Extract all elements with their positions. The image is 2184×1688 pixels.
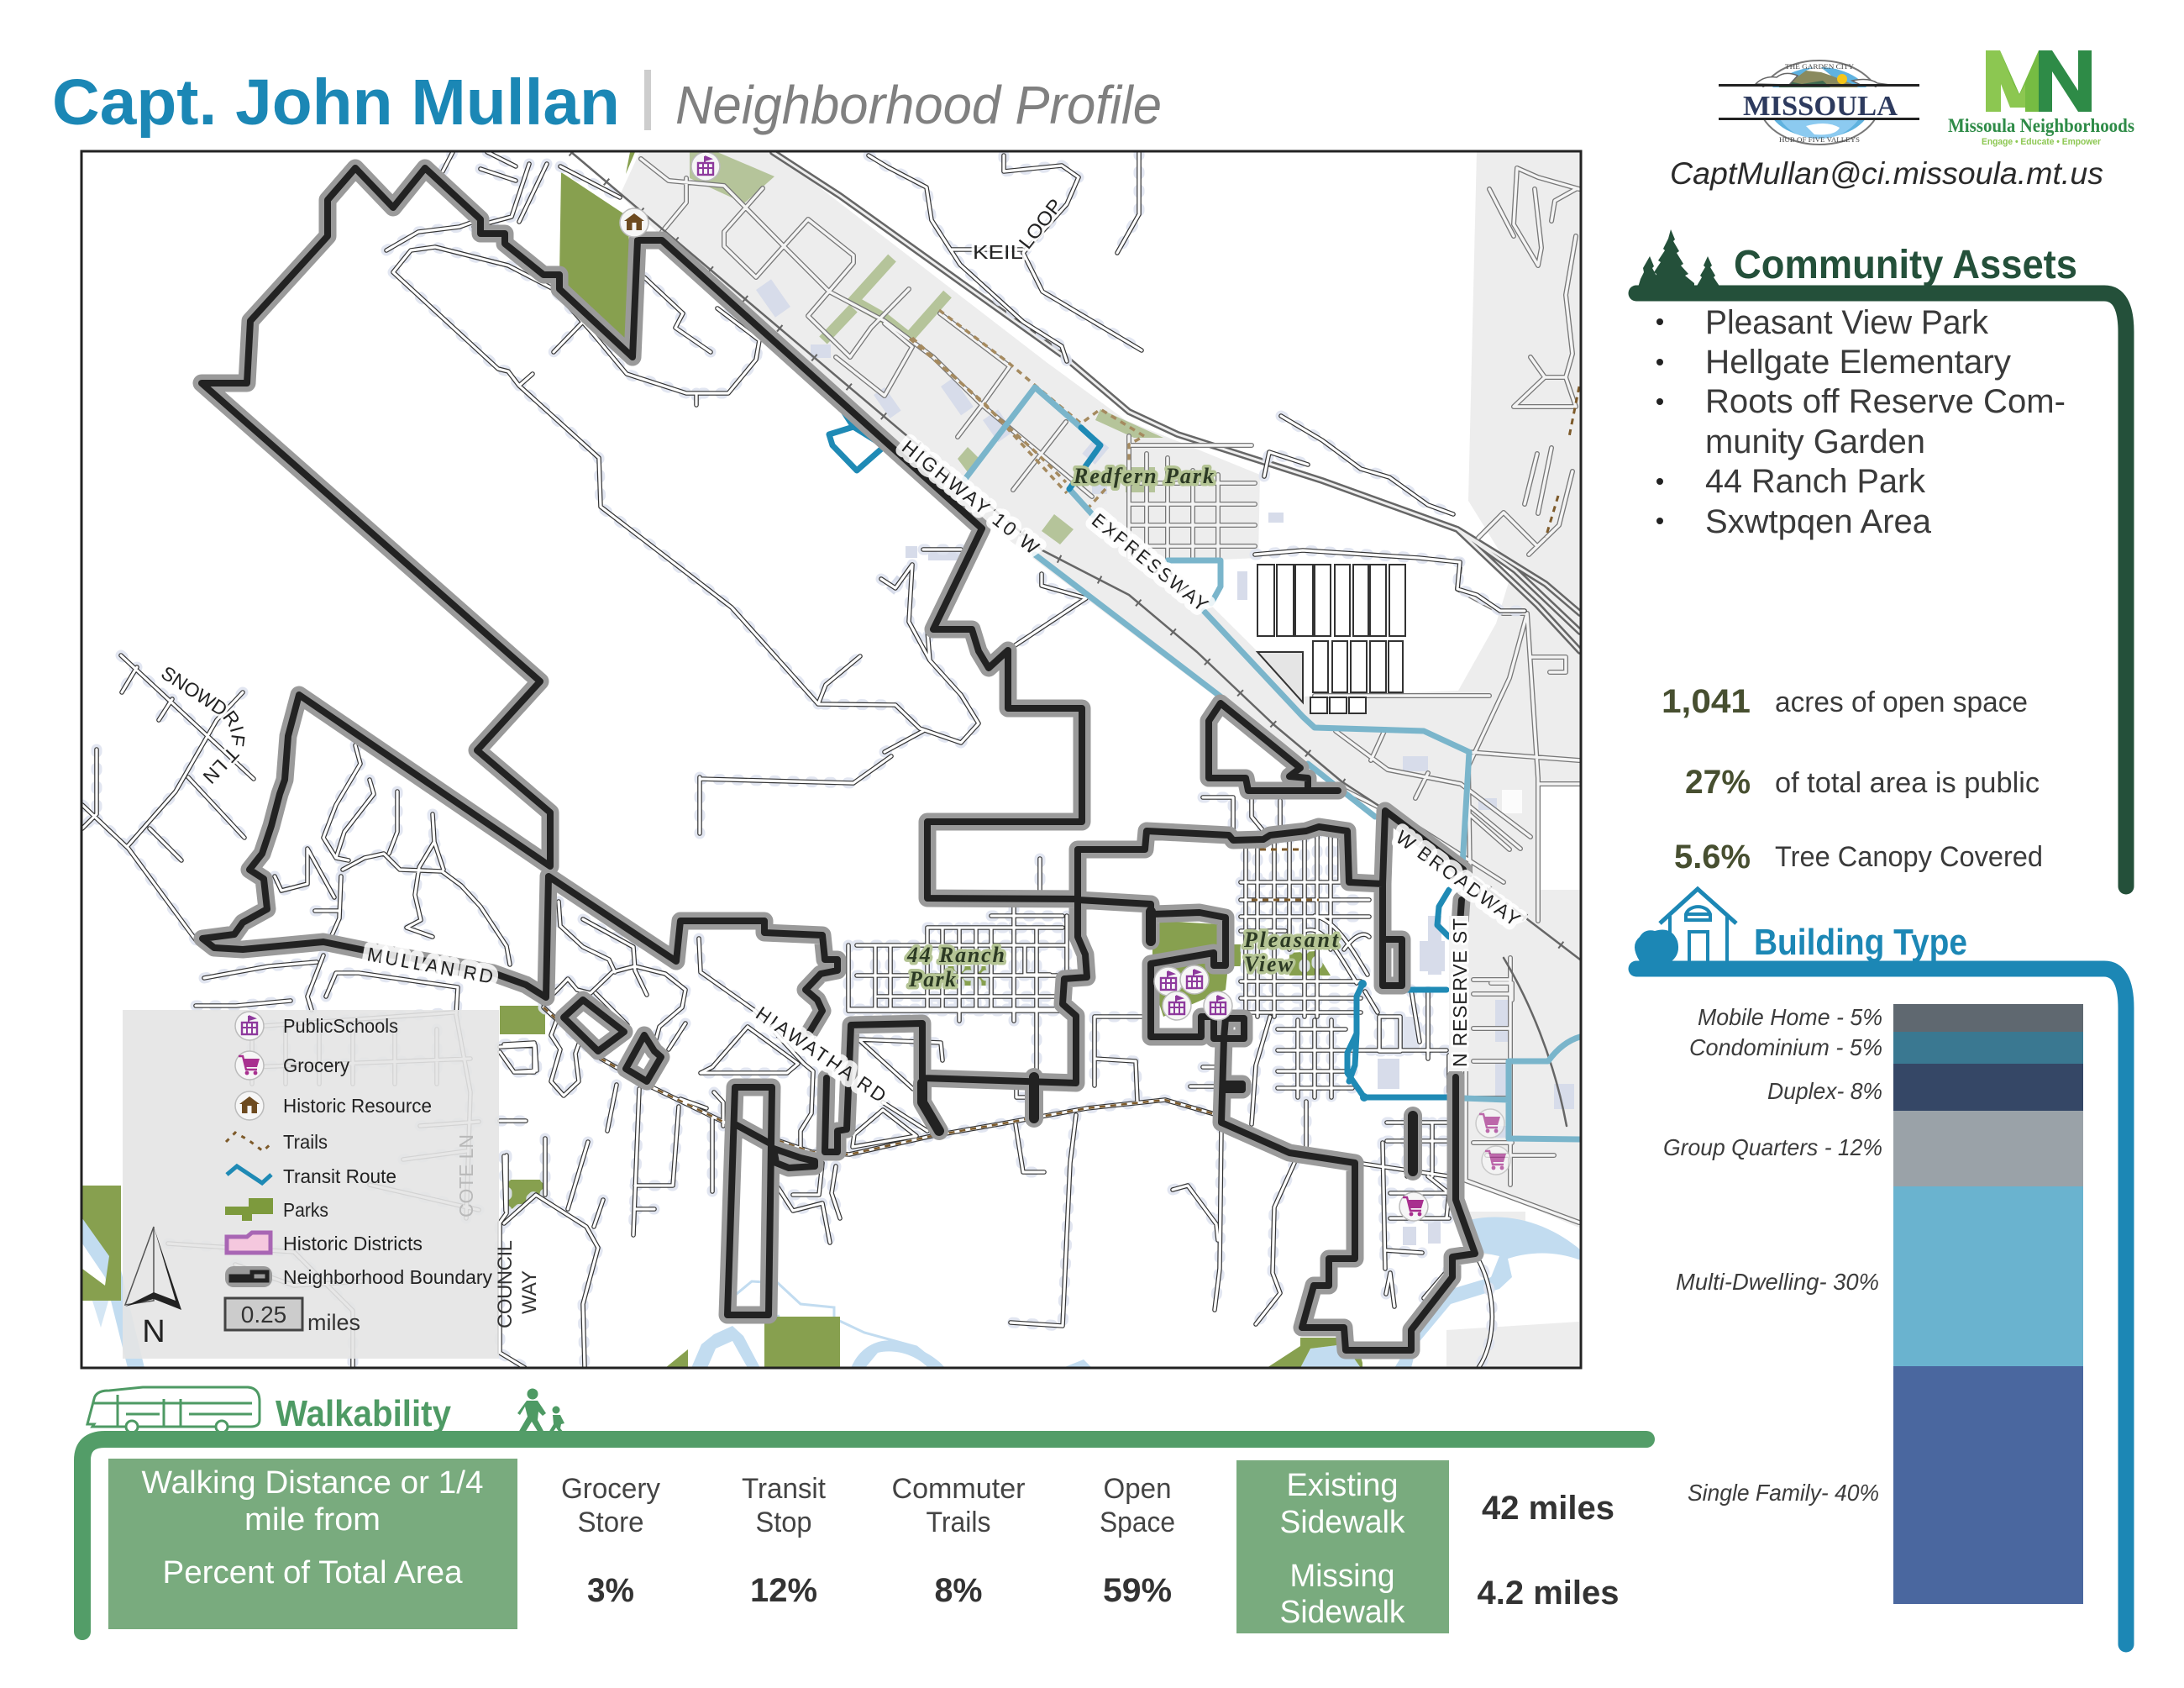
column: commuter trails: 8%	[934, 1572, 983, 1609]
roads on gray	[641, 159, 1579, 1223]
north arrow: N	[142, 1314, 165, 1349]
scale bar: miles	[307, 1310, 360, 1335]
map icons: grocery	[1399, 1109, 1510, 1221]
stat: public area: 27%	[1685, 764, 1751, 801]
scale bar	[225, 1298, 360, 1335]
logo: Missoula Neighborhoods	[1948, 50, 2134, 147]
asset list: Hellgate Elementary	[1705, 344, 2011, 381]
reserve street label band	[1449, 916, 1468, 1071]
map panel	[82, 153, 1579, 1366]
legend entries: Parks	[283, 1199, 328, 1221]
park labels: Redfern Park	[1073, 464, 1214, 488]
light parks	[690, 152, 1163, 544]
legend entries: Grocery	[283, 1054, 349, 1076]
callout: sidewalk: Existing	[1287, 1468, 1398, 1503]
trails	[543, 310, 1579, 1154]
panel: walkability	[82, 1387, 1646, 1633]
street label: Council Way: COUNCIL	[494, 1240, 517, 1328]
parks	[82, 152, 1362, 1368]
streams	[737, 1280, 926, 1353]
legend entries: Neighborhood Boundary	[283, 1266, 492, 1288]
callout: walking distance: Walking Distance or 1/4	[141, 1465, 484, 1501]
stacked bar chart	[1893, 1004, 2083, 1604]
contact email: CaptMullan@ci.missoula.mt.us	[1670, 156, 2103, 191]
park labels	[906, 464, 1339, 991]
legend entries: PublicSchools	[283, 1015, 398, 1037]
road labels	[161, 200, 1527, 1106]
asset list	[1656, 304, 2066, 540]
bar labels: Mobile Home - 5%	[1698, 1004, 1882, 1030]
column: commuter trails	[892, 1473, 1025, 1609]
map icon: historic resource	[620, 208, 648, 237]
column: grocery store: Store	[578, 1507, 643, 1538]
logo: City of Missoula	[1719, 60, 1919, 145]
heading: Community Assets	[1734, 243, 2077, 287]
road labels: EXPRESSWAY	[1088, 509, 1212, 616]
road labels: N RESERVE ST	[1449, 918, 1471, 1067]
street label: Council Way: WAY	[518, 1270, 541, 1314]
road labels: HIGHWAY 10 W	[898, 436, 1043, 559]
callout: sidewalk: Sidewalk	[1280, 1505, 1405, 1540]
asset list: 44 Ranch Park	[1705, 463, 1926, 500]
north arrow	[125, 1227, 181, 1349]
heading: Walkability	[276, 1393, 451, 1434]
column: open space: Space	[1100, 1507, 1175, 1538]
park labels: 44 Ranch	[906, 943, 1005, 967]
park labels: Pleasant	[1243, 928, 1339, 952]
road labels: SNOWDRIFT LN	[161, 667, 245, 784]
asset list: Roots off Reserve Com-	[1705, 383, 2066, 420]
asset list: munity Garden	[1705, 423, 1925, 460]
road labels: W BROADWAY	[1392, 826, 1525, 930]
subtitle divider	[644, 70, 651, 130]
legend entries: Transit Route	[283, 1165, 396, 1187]
bracket	[1636, 293, 2126, 886]
park labels: View	[1244, 952, 1294, 976]
callout: walking distance: mile from	[244, 1502, 381, 1538]
column: transit stop	[742, 1473, 827, 1609]
column: transit stop: Stop	[756, 1507, 811, 1538]
map icon: school north	[691, 152, 720, 181]
faded street label: COTE LN	[455, 1134, 477, 1217]
legend entries	[225, 1012, 492, 1288]
stat: open space: acres of open space	[1775, 686, 2028, 718]
residential block outlines	[1257, 565, 1405, 713]
column: transit stop: Transit	[742, 1473, 827, 1505]
railway	[773, 152, 1580, 651]
logo: City of Missoula: HUB OF FIVE VALLEYS	[1779, 136, 1860, 144]
park labels: Park	[908, 967, 956, 991]
urban gray area	[620, 151, 1581, 1368]
bracket	[82, 1439, 1646, 1632]
column: commuter trails: Trails	[926, 1507, 991, 1538]
column: open space: Open	[1104, 1473, 1171, 1505]
road labels: KEIL	[973, 241, 1023, 263]
stat: public area	[1685, 764, 2040, 801]
transit routes	[829, 387, 1580, 1139]
icon: pine trees	[1638, 229, 1720, 287]
map frame	[81, 151, 1581, 1368]
stat: open space: 1,041	[1662, 683, 1751, 720]
bar labels: Single Family- 40%	[1688, 1480, 1879, 1506]
column: grocery store: 3%	[587, 1572, 634, 1609]
column: open space	[1100, 1473, 1175, 1609]
bar labels: Multi-Dwelling- 30%	[1676, 1269, 1879, 1295]
building footprints	[756, 279, 1574, 1245]
stat: tree canopy: 5.6%	[1674, 839, 1751, 876]
callout: walking distance	[108, 1459, 517, 1629]
road labels: HIAWATHA RD	[752, 1002, 890, 1107]
asset list: Pleasant View Park	[1705, 304, 1989, 341]
column: grocery store	[561, 1473, 660, 1609]
heading: Building Type	[1754, 922, 1967, 963]
logo: City of Missoula: MISSOULA	[1743, 91, 1898, 122]
road labels: LOOP	[1014, 194, 1067, 253]
water	[82, 1216, 1581, 1368]
logo: Missoula Neighborhoods: Engage • Educate • Empower	[1982, 137, 2102, 147]
bar labels: Group Quarters - 12%	[1663, 1134, 1882, 1160]
asset list: Sxwtpqen Area	[1705, 503, 1932, 540]
bar labels: Duplex- 8%	[1767, 1078, 1882, 1104]
icon: walkers	[517, 1388, 564, 1433]
icon: bus	[87, 1387, 260, 1433]
subtitle: Neighborhood Profile	[675, 75, 1162, 135]
callout: sidewalk: Sidewalk	[1280, 1595, 1405, 1630]
bar labels	[1663, 1004, 1882, 1506]
stat: tree canopy	[1674, 839, 2043, 876]
map icon: schools cluster	[1154, 965, 1232, 1020]
callout: walking distance: Percent of Total Area	[163, 1555, 463, 1591]
road labels: MULLAN RD	[365, 943, 495, 988]
logo: Missoula Neighborhoods: Missoula Neighborhoods	[1948, 115, 2134, 136]
bracket	[1636, 969, 2126, 1644]
column: grocery store: Grocery	[561, 1473, 660, 1505]
legend entries: Historic Resource	[283, 1095, 432, 1117]
stat: missing sidewalk miles: 4.2 miles	[1477, 1575, 1620, 1612]
legend entries: Trails	[283, 1131, 328, 1153]
column: transit stop: 12%	[750, 1572, 817, 1609]
callout: sidewalk	[1236, 1460, 1449, 1633]
panel: community assets	[1636, 229, 2126, 886]
icon: house and bush	[1635, 889, 1736, 961]
legend	[123, 1010, 499, 1359]
legend entries: Historic Districts	[283, 1233, 423, 1254]
bar labels: Condominium - 5%	[1689, 1034, 1882, 1060]
stat: tree canopy: Tree Canopy Covered	[1775, 841, 2043, 873]
building dots along streets	[82, 152, 1525, 1368]
panel: building type	[1635, 889, 2126, 1644]
street label: Council Way	[497, 1240, 536, 1328]
column: open space: 59%	[1103, 1572, 1172, 1609]
white streets	[82, 152, 1525, 1368]
logo: City of Missoula: THE GARDEN CITY	[1785, 63, 1854, 71]
title: Capt. John Mullan	[52, 66, 620, 139]
scale bar: 0.25	[241, 1301, 286, 1328]
callout: sidewalk: Missing	[1290, 1559, 1394, 1594]
highway center line	[571, 152, 1580, 1126]
stat: public area: of total area is public	[1775, 767, 2040, 799]
neighborhood boundary	[202, 168, 1475, 1350]
stat: open space	[1662, 683, 2028, 720]
stat: existing sidewalk miles: 42 miles	[1482, 1490, 1614, 1527]
column: commuter trails: Commuter	[892, 1473, 1025, 1505]
